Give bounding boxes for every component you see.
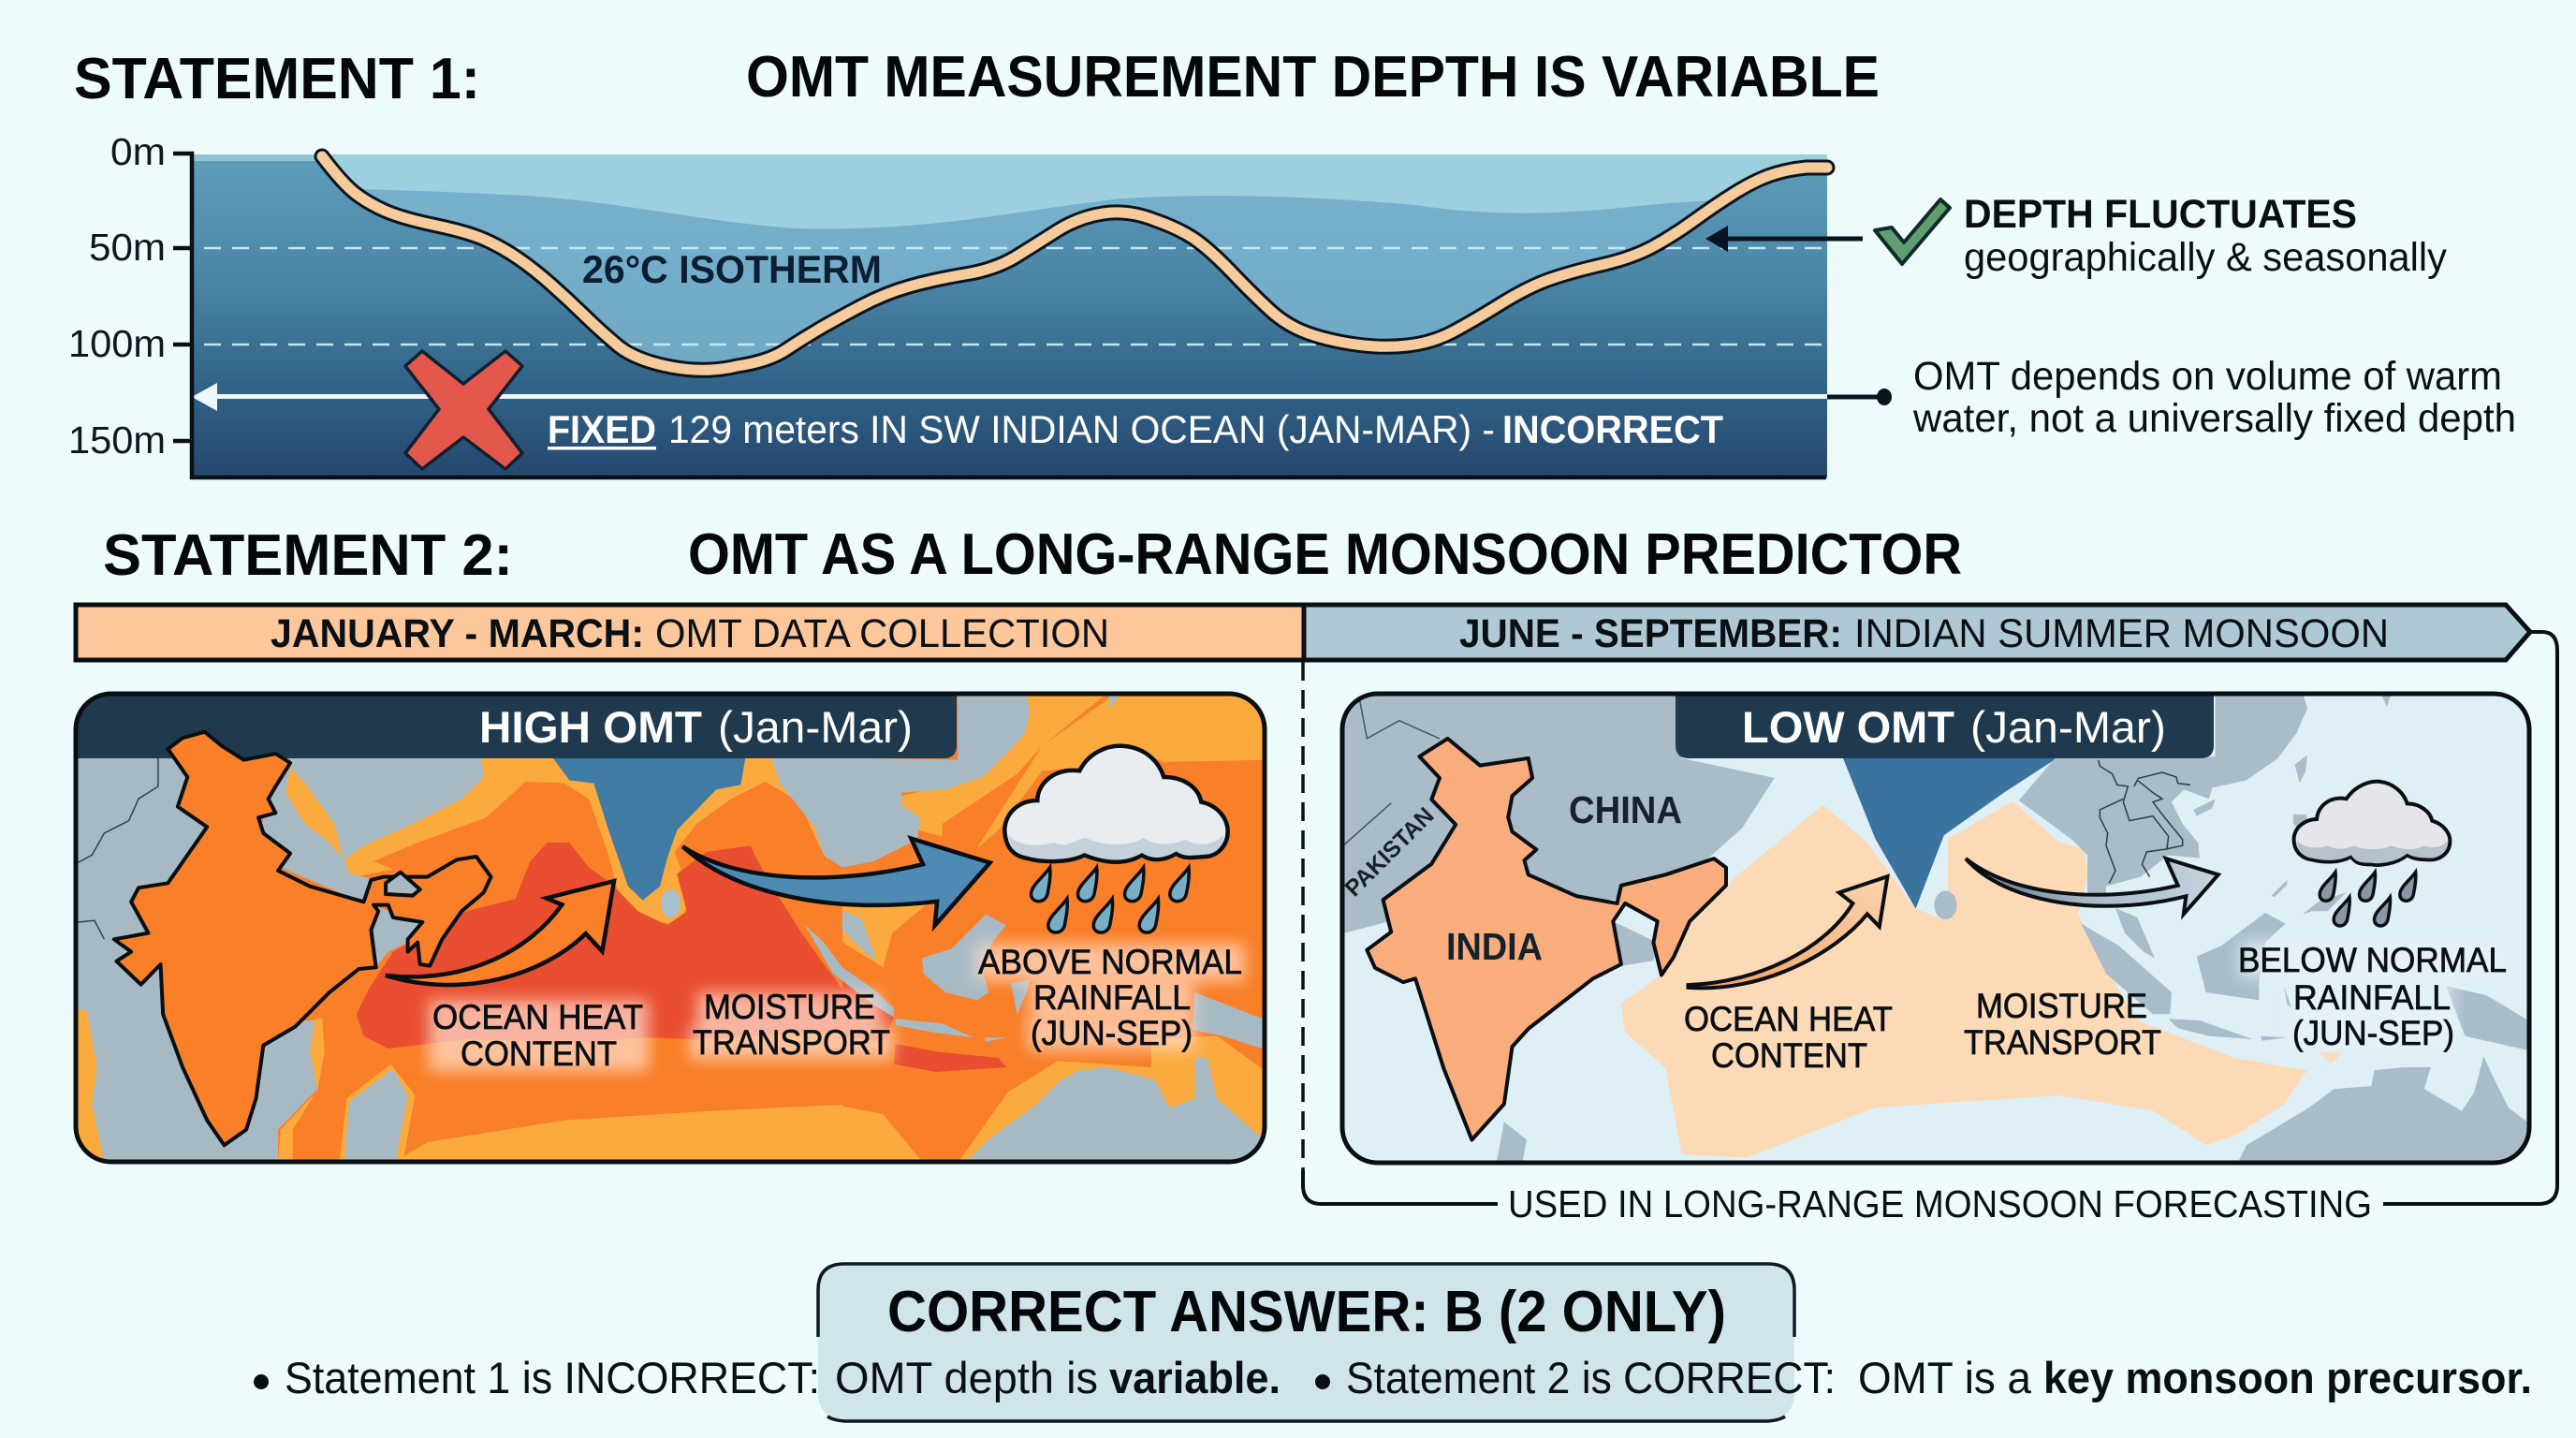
label: above normal rainfall: RAINFALL — [1033, 978, 1191, 1017]
thin country borders — [1342, 696, 1440, 846]
timeline segment: data collection: JANUARY - MARCH: — [271, 611, 644, 656]
western half of the heat map — [75, 756, 842, 1163]
answer box outline — [818, 1264, 1794, 1421]
label: above normal rainfall: (JUN-SEP) — [1031, 1014, 1193, 1052]
label: ocean heat content — [432, 998, 643, 1073]
thin SE Asia borders — [2099, 760, 2190, 883]
label glow patches — [429, 944, 1245, 1071]
header tab: low OMT: LOW OMT — [1742, 702, 1954, 752]
summary: statement 2: OMT is a — [1858, 1353, 2032, 1402]
top surface highlight — [192, 154, 323, 161]
explanation text: OMT depends on volume of warm — [1913, 354, 2502, 399]
summary: statement 2: Statement 2 is CORRECT: — [1346, 1353, 1836, 1402]
callout text — [1964, 192, 2447, 280]
explanation text: water, not a universally fixed depth — [1912, 396, 2516, 441]
header tab: high OMT: HIGH OMT — [479, 702, 702, 752]
label: ocean heat content: CONTENT — [1711, 1036, 1867, 1075]
warm water blob — [1621, 801, 2307, 1158]
grey land east — [2019, 693, 2534, 1164]
high OMT map art — [75, 693, 1266, 1167]
header tab: low OMT: (Jan-Mar) — [1970, 702, 2166, 752]
label: ocean heat content: OCEAN HEAT — [432, 998, 643, 1036]
axis labels: 100m — [68, 322, 166, 365]
icon: rain cloud — [1004, 746, 1228, 932]
heading: statement 1 title: OMT MEASUREMENT DEPTH IS VARIABLE — [746, 45, 1880, 110]
ocean deep water gradient — [192, 154, 1827, 477]
neighbouring borders — [78, 758, 158, 939]
label: Pakistan: PAKISTAN — [1339, 802, 1440, 902]
peninsula in ocean blue — [552, 756, 746, 901]
timeline — [76, 605, 2530, 1187]
depth chart: ocean cross-section — [68, 130, 1827, 477]
26C isotherm curve — [322, 156, 1827, 370]
bracket line — [1303, 632, 2557, 1204]
timeline segment: data collection: OMT DATA COLLECTION — [655, 611, 1109, 656]
map of India: high OMT — [114, 732, 491, 1145]
label: moisture transport: TRANSPORT — [1964, 1023, 2161, 1062]
small warm patch — [2319, 1051, 2343, 1064]
isotherm label: 26°C ISOTHERM — [582, 247, 882, 291]
western half of the map — [1335, 692, 2307, 1165]
header tab: low OMT — [1676, 694, 2214, 758]
heading: statement 2 title: OMT AS A LONG-RANGE MONSOON PREDICTOR — [688, 522, 1962, 587]
arrows and cloud layer — [386, 839, 990, 985]
bracket: long-range forecasting — [1303, 632, 2557, 1225]
summary: statement 1: Statement 1 is INCORRECT: — [285, 1353, 820, 1402]
arrow to isotherm — [1705, 226, 1863, 252]
summary: statement 1: OMT depth is — [835, 1353, 1098, 1402]
axis labels: 150m — [68, 418, 166, 462]
timeline segment: monsoon arrow: JUNE - SEPTEMBER: — [1459, 611, 1842, 656]
answer box background — [818, 1264, 1794, 1421]
grey land east — [770, 693, 1266, 1167]
panel: low OMT map — [1335, 692, 2534, 1165]
axis labels: 0m — [110, 130, 166, 173]
eastern half of the heat map — [770, 693, 1266, 1167]
arrow: ocean heat — [386, 881, 614, 985]
axis labels — [68, 130, 166, 462]
label glow patches — [2239, 942, 2505, 1049]
callout: depth fluctuates — [1705, 192, 2447, 280]
axis labels: 50m — [89, 226, 166, 269]
sri lanka — [1934, 891, 1957, 919]
light orange water west — [278, 758, 842, 1163]
bracket caption: USED IN LONG-RANGE MONSOON FORECASTING — [1508, 1182, 2372, 1225]
arrow: ocean heat — [1688, 876, 1887, 988]
panel border — [76, 694, 1265, 1162]
answer box — [818, 1264, 1794, 1421]
header tab: high OMT — [76, 694, 957, 758]
depth gridline 50m — [204, 247, 1825, 249]
label: ocean heat content — [1684, 1000, 1893, 1075]
summary: statement 2: key monsoon precursor. — [2043, 1353, 2532, 1402]
fixed depth caption: 129 meters IN SW INDIAN OCEAN (JAN-MAR) - — [668, 407, 1495, 451]
icon: rain cloud — [2294, 782, 2450, 926]
label: below normal rainfall: RAINFALL — [2293, 978, 2451, 1017]
label: above normal rainfall — [978, 943, 1242, 1052]
label: above normal rainfall: ABOVE NORMAL — [978, 943, 1242, 981]
warm pool red area — [357, 843, 842, 1049]
label: moisture transport — [693, 988, 890, 1062]
timeline divider — [1301, 662, 1305, 1187]
label: ocean heat content: OCEAN HEAT — [1684, 1000, 1893, 1038]
label: moisture transport — [1964, 987, 2161, 1062]
heading: statement 2 label: STATEMENT 2: — [103, 523, 513, 588]
header tab: high OMT: (Jan-Mar) — [718, 702, 913, 752]
summary: statement 2 — [1315, 1353, 2532, 1402]
grey land west — [1335, 692, 1775, 1165]
fixed depth arrow — [192, 383, 1827, 411]
label: below normal rainfall: (JUN-SEP) — [2292, 1014, 2454, 1052]
sri lanka — [661, 889, 681, 917]
arrows layer — [1688, 858, 2218, 988]
label: China: CHINA — [1569, 788, 1682, 831]
label: moisture transport: MOISTURE — [704, 988, 875, 1026]
icon: red cross — [405, 351, 522, 469]
connector dot — [1827, 389, 1892, 405]
coastal light strips — [75, 768, 344, 1163]
panel: high OMT map — [75, 693, 1266, 1167]
panel border — [1342, 694, 2529, 1163]
label: below normal rainfall — [2238, 941, 2507, 1052]
depth gridline 100m — [204, 344, 1825, 345]
timeline segment: monsoon arrow — [1304, 605, 2530, 660]
explanation text — [1912, 354, 2516, 441]
label: below normal rainfall: BELOW NORMAL — [2238, 941, 2507, 979]
timeline segment: data collection — [76, 605, 1304, 660]
warm pool continuation — [842, 981, 894, 1042]
warm water layer above isotherm — [330, 154, 1827, 362]
fixed depth caption: FIXED — [548, 407, 656, 451]
label: India: INDIA — [1446, 925, 1543, 968]
answer heading: CORRECT ANSWER: B (2 ONLY) — [887, 1280, 1726, 1344]
label: moisture transport: TRANSPORT — [693, 1023, 890, 1062]
icon: green check — [1875, 199, 1950, 264]
map of India: low OMT — [1367, 739, 1726, 1140]
label: moisture transport: MOISTURE — [1976, 987, 2147, 1025]
arrow: moisture transport — [1966, 858, 2218, 914]
heading: statement 1 label: STATEMENT 1: — [74, 47, 480, 111]
grey land west — [75, 756, 484, 1163]
callout text: DEPTH FLUCTUATES — [1964, 192, 2357, 237]
arrow: moisture transport — [682, 839, 990, 926]
light orange water east — [842, 693, 1266, 1167]
secondary red patch — [894, 1044, 1006, 1072]
peninsula in ocean blue — [1843, 758, 2056, 909]
fixed depth caption: INCORRECT — [1502, 407, 1723, 451]
callout: OMT depends on volume — [1827, 354, 2516, 441]
low OMT map art — [1335, 692, 2534, 1165]
timeline segment: monsoon arrow: INDIAN SUMMER MONSOON — [1854, 611, 2389, 656]
chart axes — [173, 154, 1826, 477]
callout text: geographically & seasonally — [1964, 235, 2447, 280]
eastern half of the map — [2019, 693, 2534, 1164]
label: ocean heat content: CONTENT — [461, 1034, 617, 1073]
summary: statement 1 — [254, 1353, 1281, 1402]
summary: statement 1: variable. — [1109, 1353, 1281, 1402]
